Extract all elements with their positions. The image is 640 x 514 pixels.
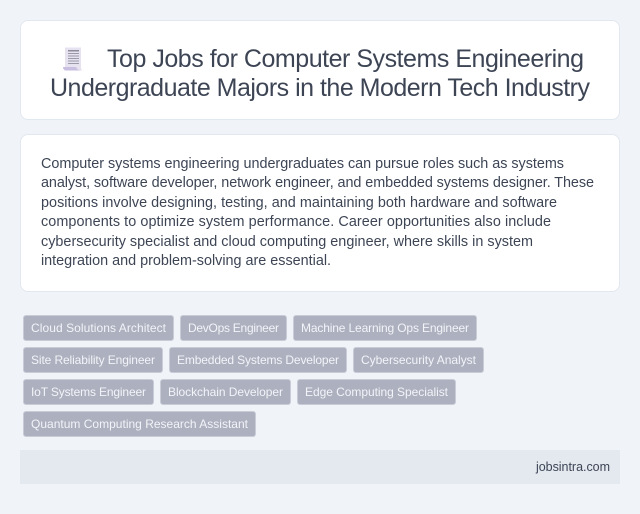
title <box>50 45 590 102</box>
description text: analyst, software developer, network engineer, and embedded systems designer. These <box>41 175 594 191</box>
job tag labels: Edge Computing Specialist <box>305 385 449 399</box>
panel: description card <box>20 134 620 292</box>
tag background: Site Reliability Engineer <box>23 347 163 373</box>
icon: document scroll <box>63 48 82 70</box>
description text <box>41 156 594 269</box>
job tag labels: DevOps Engineer <box>188 321 279 335</box>
panel: title card <box>20 20 620 120</box>
description text: integration and problem-solving are essential. <box>41 253 331 269</box>
job tag labels: Machine Learning Ops Engineer <box>301 321 469 335</box>
job tag labels: Cybersecurity Analyst <box>361 353 477 367</box>
job tag labels: Quantum Computing Research Assistant <box>31 417 249 431</box>
description text: components to optimize system performance. Career opportunities also include <box>41 214 551 230</box>
tag background: Machine Learning Ops Engineer <box>293 315 477 341</box>
description text: positions involve designing, testing, and maintaining both hardware and software <box>41 195 557 211</box>
job tag labels: Site Reliability Engineer <box>31 353 155 367</box>
tag background: Quantum Computing Research Assistant <box>23 411 256 437</box>
description text: cybersecurity specialist and cloud computing engineer, where skills in system <box>41 234 533 250</box>
tag background: Cloud Solutions Architect <box>23 315 174 341</box>
panel: footer bar <box>20 450 620 484</box>
title: Undergraduate Majors in the Modern Tech Industry <box>50 74 590 102</box>
tag background: IoT Systems Engineer <box>23 379 154 405</box>
footer source text: jobsintra.com <box>535 460 610 474</box>
tag background: Blockchain Developer <box>160 379 291 405</box>
title: Top Jobs for Computer Systems Engineering <box>107 45 584 73</box>
description text: Computer systems engineering undergraduates can pursue roles such as systems <box>41 156 564 172</box>
tag background: Cybersecurity Analyst <box>353 347 484 373</box>
tag background: Edge Computing Specialist <box>297 379 456 405</box>
job tag labels: Blockchain Developer <box>168 385 283 399</box>
job tag labels: Embedded Systems Developer <box>177 353 339 367</box>
job tag labels: Cloud Solutions Architect <box>31 321 167 335</box>
job tag labels: IoT Systems Engineer <box>31 385 146 399</box>
tag background: Embedded Systems Developer <box>169 347 347 373</box>
tag background: DevOps Engineer <box>180 315 287 341</box>
job tag labels <box>31 321 477 431</box>
